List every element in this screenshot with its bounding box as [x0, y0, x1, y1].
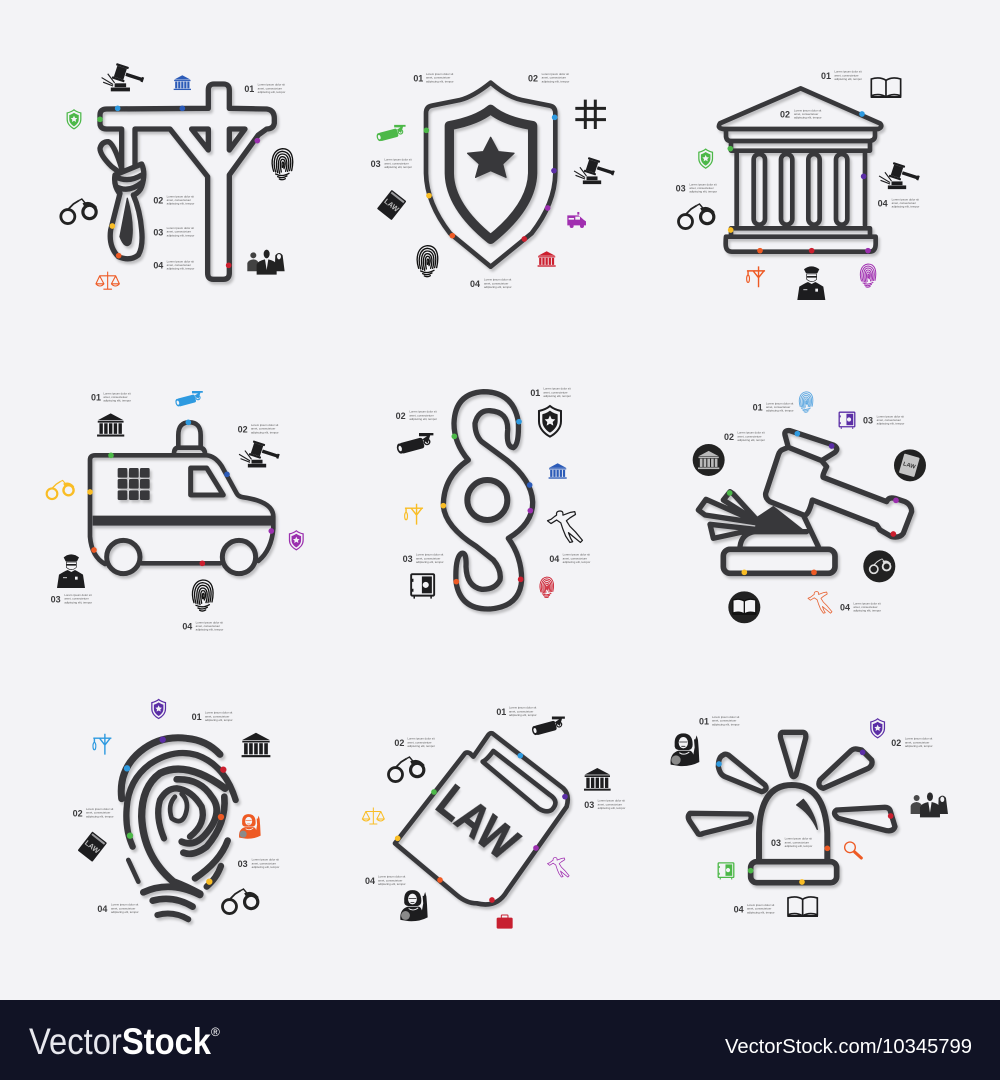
label 03 [153, 226, 194, 237]
label 04: 04 [840, 603, 850, 613]
label 02: adipiscing elit, tempor [86, 814, 114, 818]
panel: shield [371, 72, 616, 289]
label 03: Lorem ipsum dolor sit [64, 593, 92, 597]
label 02 [396, 410, 437, 421]
label 04: amet, consectetuer [563, 556, 587, 560]
label 01: amet, consectetuer [426, 76, 450, 80]
label 04: 04 [182, 622, 192, 632]
route dots [423, 114, 557, 242]
registered mark: ® [211, 1025, 220, 1039]
label 03: Lorem ipsum dolor sit [877, 414, 904, 418]
label 01 [496, 706, 537, 717]
label 04 [549, 553, 590, 564]
label 03: adipiscing elit, tempor [64, 600, 92, 604]
icon: camera [175, 391, 203, 407]
icon: shield [152, 699, 165, 719]
icon: handcuffs [47, 480, 74, 499]
label 04 [734, 903, 775, 914]
label 02: 02 [891, 738, 901, 748]
gallows outline [100, 84, 274, 279]
icon: handcuffs [388, 757, 424, 782]
label 01 [413, 72, 454, 83]
panel: courthouse [676, 70, 921, 300]
label 01 [753, 401, 794, 413]
label 04: amet, consectetuer [378, 878, 402, 882]
label 01: Lorem ipsum dolor sit [205, 711, 233, 715]
label 03 [403, 553, 444, 564]
label 03: amet, consectetuer [598, 802, 622, 806]
icon: shield [539, 406, 561, 437]
icon: bank in circle [693, 444, 725, 476]
label 03: Lorem ipsum dolor sit [252, 858, 279, 862]
label 02: Lorem ipsum dolor sit [407, 737, 435, 741]
label 03: Lorem ipsum dolor sit [785, 837, 812, 841]
label 02: adipiscing elit, tempor [794, 116, 822, 120]
label 02: adipiscing elit, tempor [251, 430, 279, 434]
label 01 [699, 715, 740, 726]
label 02: adipiscing elit, tempor [542, 79, 569, 83]
label 01: adipiscing elit, tempor [258, 90, 285, 94]
label 04: Lorem ipsum dolor sit [853, 601, 881, 605]
label 03 [771, 837, 812, 848]
label 04: 04 [734, 904, 744, 914]
label 03: Lorem ipsum dolor sit [416, 553, 444, 557]
label 02: 02 [394, 738, 404, 748]
label 03 [584, 799, 625, 810]
label 02: 02 [528, 73, 538, 83]
icon: bank [97, 413, 124, 437]
courthouse outline [719, 88, 881, 252]
label 03: Lorem ipsum dolor sit [384, 158, 412, 162]
label 02: 02 [153, 196, 163, 206]
label 02: amet, consectetuer [794, 112, 818, 116]
icon: gavel [879, 162, 921, 189]
icon: people [911, 792, 948, 817]
label 01 [244, 83, 285, 94]
icon: gavel [102, 63, 146, 91]
label 02 [724, 431, 765, 442]
label 02 [780, 108, 822, 120]
label 02: Lorem ipsum dolor sit [86, 807, 114, 811]
label 03: amet, consectetuer [64, 597, 89, 601]
icon: scales [362, 807, 384, 824]
label 04 [840, 601, 881, 613]
label 04: adipiscing elit, tempor [892, 205, 919, 209]
label 02: amet, consectetuer [167, 198, 191, 202]
label 03: adipiscing elit, tempor [416, 560, 444, 564]
label 02: 02 [780, 110, 790, 120]
icon: law book in circle [894, 449, 926, 481]
footer image id: VectorStock.com/10345799 [725, 1036, 972, 1058]
label 04: adipiscing elit, tempor [196, 628, 223, 632]
label 01 [530, 387, 571, 398]
icon: crime scene body [547, 858, 569, 877]
icon: safe [839, 412, 855, 429]
label 03: 03 [863, 416, 873, 426]
label 01: Lorem ipsum dolor sit [103, 391, 131, 395]
label 03: amet, consectetuer [384, 161, 409, 165]
label 01: 01 [821, 71, 831, 81]
label 01: amet, consectetuer [258, 86, 282, 90]
label 03 [371, 158, 412, 169]
label 02 [394, 737, 435, 748]
label 03: 03 [153, 227, 163, 237]
icon: prison bars [575, 100, 606, 129]
label 01: amet, consectetuer [766, 405, 790, 409]
label 04: 04 [878, 199, 888, 209]
icon: crime scene body [547, 511, 582, 542]
label 02: adipiscing elit, tempor [167, 202, 194, 206]
label 02: adipiscing elit, tempor [737, 438, 765, 442]
route dots [97, 105, 260, 268]
label 04: adipiscing elit, tempor [563, 560, 590, 564]
label 01: Lorem ipsum dolor sit [543, 387, 571, 391]
icon: gallows [93, 734, 111, 755]
van outline [90, 422, 273, 574]
icon: open book in circle [728, 591, 760, 623]
label 03: amet, consectetuer [785, 840, 809, 844]
label 02 [238, 423, 279, 434]
label 04: Lorem ipsum dolor sit [111, 903, 139, 907]
route dots [124, 736, 226, 885]
law book title: LAW [427, 775, 528, 869]
label 02 [73, 807, 114, 818]
label 01 [91, 391, 131, 403]
label 04 [97, 903, 139, 914]
label 03: Lorem ipsum dolor sit [689, 182, 717, 186]
label 01: Lorem ipsum dolor sit [834, 70, 862, 74]
law book outline [395, 733, 568, 904]
label 01: adipiscing elit, tempor [103, 399, 131, 403]
label 04: 04 [365, 876, 375, 886]
icon: camera [396, 433, 433, 455]
label 03: amet, consectetuer [877, 418, 901, 422]
label 01: 01 [91, 393, 101, 403]
icon: fingerprint [192, 580, 213, 611]
label 01: amet, consectetuer [834, 73, 859, 77]
icon: law book [78, 831, 107, 862]
label 04 [878, 197, 919, 209]
label 02: Lorem ipsum dolor sit [409, 410, 437, 414]
gavel outline [698, 431, 912, 573]
label 04 [182, 620, 223, 632]
label 01: amet, consectetuer [509, 709, 533, 713]
label 01: Lorem ipsum dolor sit [712, 715, 740, 719]
label 04: Lorem ipsum dolor sit [892, 197, 919, 201]
label 01: adipiscing elit, tempor [834, 77, 862, 81]
label 03: 03 [771, 838, 781, 848]
label 04: amet, consectetuer [196, 624, 220, 628]
label 04: adipiscing elit, tempor [853, 609, 881, 613]
label 04: 04 [97, 904, 107, 914]
route dots [727, 431, 899, 575]
panel: fingerprint [73, 699, 279, 919]
icon: gallows [747, 266, 765, 287]
icon: crime scene body [808, 592, 832, 613]
siren outline [688, 732, 895, 883]
route dots [440, 419, 533, 584]
route dots [395, 753, 568, 903]
icon: judge [400, 890, 428, 921]
icon: gallows [405, 504, 423, 525]
label 01: 01 [496, 707, 506, 717]
label 02: Lorem ipsum dolor sit [251, 423, 279, 427]
label 03: adipiscing elit, tempor [167, 233, 194, 237]
label 04 [470, 278, 512, 289]
label 04: 04 [470, 279, 480, 289]
icon: fingerprint [417, 246, 438, 277]
icon: open book [871, 78, 901, 97]
icon: shield [871, 719, 884, 738]
icon: briefcase [497, 915, 513, 929]
icon: handcuffs [222, 889, 258, 914]
label 01: adipiscing elit, tempor [426, 79, 454, 83]
label 04: Lorem ipsum dolor sit [484, 278, 512, 282]
icon: bank [174, 75, 191, 90]
icon: camera [376, 125, 406, 142]
icon: shield [289, 531, 303, 550]
label 03: amet, consectetuer [252, 861, 276, 865]
label 01: amet, consectetuer [103, 395, 128, 399]
label 04: Lorem ipsum dolor sit [167, 259, 194, 263]
icon: fingerprint [799, 392, 813, 412]
label 04: amet, consectetuer [853, 605, 878, 609]
label 02: adipiscing elit, tempor [409, 417, 437, 421]
label 01: 01 [244, 84, 254, 94]
label 03: adipiscing elit, tempor [689, 190, 717, 194]
label 03 [51, 593, 92, 604]
label 03: 03 [238, 859, 248, 869]
label 02: 02 [73, 808, 83, 818]
label 02: amet, consectetuer [407, 740, 432, 744]
label 03: Lorem ipsum dolor sit [167, 226, 194, 230]
label 01: adipiscing elit, tempor [712, 722, 740, 726]
icon: fingerprint [272, 149, 293, 180]
icon: magnifier [845, 842, 861, 858]
footer bar [0, 1000, 1000, 1080]
label 02: amet, consectetuer [905, 740, 929, 744]
label 02: Lorem ipsum dolor sit [794, 108, 822, 112]
label 03 [238, 858, 279, 869]
label 02: Lorem ipsum dolor sit [905, 737, 933, 741]
label 03 [863, 414, 904, 426]
icon: judge [239, 814, 261, 839]
icon: shield [67, 110, 81, 129]
label 01: Lorem ipsum dolor sit [426, 72, 454, 76]
label 01: amet, consectetuer [205, 714, 229, 718]
label 01: Lorem ipsum dolor sit [258, 83, 285, 87]
footer logo: VectorStock [29, 1021, 211, 1062]
section sign outline [443, 392, 533, 609]
label 02: amet, consectetuer [251, 427, 275, 431]
icon: police van [567, 212, 586, 228]
label 03: 03 [51, 594, 61, 604]
icon: people [247, 250, 285, 275]
icon: safe [411, 574, 434, 599]
panel: law book [362, 706, 625, 929]
label 04: amet, consectetuer [484, 281, 508, 285]
label 03: 03 [371, 159, 381, 169]
label 04: adipiscing elit, tempor [484, 285, 512, 289]
label 02: Lorem ipsum dolor sit [542, 72, 569, 76]
icon: shield [699, 149, 712, 168]
label 02: 02 [724, 432, 734, 442]
icon: gavel [239, 440, 281, 467]
label 03: adipiscing elit, tempor [877, 422, 904, 426]
label 03: 03 [403, 554, 413, 564]
icon: officer [57, 554, 85, 588]
label 04: adipiscing elit, tempor [167, 267, 194, 271]
label 04: adipiscing elit, tempor [111, 910, 139, 914]
icon: bank [549, 463, 567, 479]
route dots [716, 749, 893, 885]
label 02: 02 [396, 411, 406, 421]
icon: open book [787, 897, 818, 916]
panel: section sign [396, 387, 590, 609]
label 02: 02 [238, 424, 248, 434]
label 01: 01 [192, 712, 202, 722]
label 02: amet, consectetuer [737, 434, 762, 438]
label 03: amet, consectetuer [416, 556, 440, 560]
label 04: Lorem ipsum dolor sit [747, 903, 775, 907]
label 04: amet, consectetuer [892, 201, 916, 205]
label 04: Lorem ipsum dolor sit [563, 553, 590, 557]
label 01 [821, 70, 862, 81]
label 01: amet, consectetuer [543, 390, 568, 394]
label 04: Lorem ipsum dolor sit [378, 875, 406, 879]
label 04: amet, consectetuer [111, 906, 135, 910]
label 01: adipiscing elit, tempor [205, 718, 233, 722]
label 04: Lorem ipsum dolor sit [196, 620, 223, 624]
label 01: Lorem ipsum dolor sit [766, 401, 794, 405]
icon: handcuffs in circle [863, 550, 895, 582]
label 04: 04 [153, 261, 163, 271]
label 03: adipiscing elit, tempor [598, 806, 625, 810]
icon: law book in circle: LAW [902, 461, 917, 471]
label 04 [365, 875, 406, 886]
label 01: 01 [413, 73, 423, 83]
panel: gallows [61, 63, 293, 289]
label 01: adipiscing elit, tempor [543, 394, 571, 398]
icon: handcuffs [678, 204, 714, 229]
label 01: 01 [530, 388, 540, 398]
label 03: 03 [584, 800, 594, 810]
icon: law book [377, 190, 406, 220]
route dots [727, 111, 871, 253]
icon: camera [531, 717, 565, 736]
label 03: amet, consectetuer [689, 186, 714, 190]
panel: siren [670, 715, 948, 916]
icon: judge [670, 733, 699, 766]
label 04: amet, consectetuer [747, 907, 771, 911]
icon: gavel [574, 157, 616, 184]
icon: fingerprint [860, 264, 876, 287]
label 04: 04 [549, 554, 559, 564]
label 02 [891, 737, 933, 748]
label 02: amet, consectetuer [409, 413, 434, 417]
icon: officer [797, 266, 825, 300]
label 01: adipiscing elit, tempor [766, 409, 794, 413]
icon: bank [584, 768, 611, 791]
label 03: amet, consectetuer [167, 230, 191, 234]
label 02: adipiscing elit, tempor [407, 744, 435, 748]
label 02: amet, consectetuer [542, 76, 566, 80]
label 01: adipiscing elit, tempor [509, 713, 537, 717]
icon: bank [538, 251, 556, 267]
icon: safe [718, 863, 734, 879]
label 01 [192, 711, 233, 722]
label 03: adipiscing elit, tempor [252, 865, 279, 869]
label 01: Lorem ipsum dolor sit [509, 706, 537, 710]
icon: handcuffs [61, 199, 96, 224]
icon: scales [96, 272, 119, 289]
label 01: 01 [699, 716, 709, 726]
label 03 [676, 182, 717, 194]
label 01: 01 [753, 403, 763, 413]
fingerprint ridges [121, 738, 236, 919]
icon: bank [242, 733, 270, 757]
label 04: adipiscing elit, tempor [378, 882, 406, 886]
label 04: amet, consectetuer [167, 263, 191, 267]
icon: fingerprint [540, 577, 554, 598]
label 04: adipiscing elit, tempor [747, 910, 775, 914]
label 01: amet, consectetuer [712, 719, 736, 723]
label 02: amet, consectetuer [86, 811, 110, 815]
label 03: 03 [676, 184, 686, 194]
label 03: adipiscing elit, tempor [785, 844, 812, 848]
shield outline [426, 83, 555, 267]
label 02: adipiscing elit, tempor [905, 744, 933, 748]
label 03: adipiscing elit, tempor [384, 165, 412, 169]
panel: prison van [47, 391, 303, 632]
label 04 [153, 259, 194, 271]
label 02 [153, 194, 194, 206]
label 02 [528, 72, 569, 83]
label 03: Lorem ipsum dolor sit [598, 799, 625, 803]
label 02: Lorem ipsum dolor sit [167, 194, 194, 198]
panel: gavel [693, 392, 926, 623]
label 02: Lorem ipsum dolor sit [737, 431, 765, 435]
route dots [87, 419, 274, 566]
